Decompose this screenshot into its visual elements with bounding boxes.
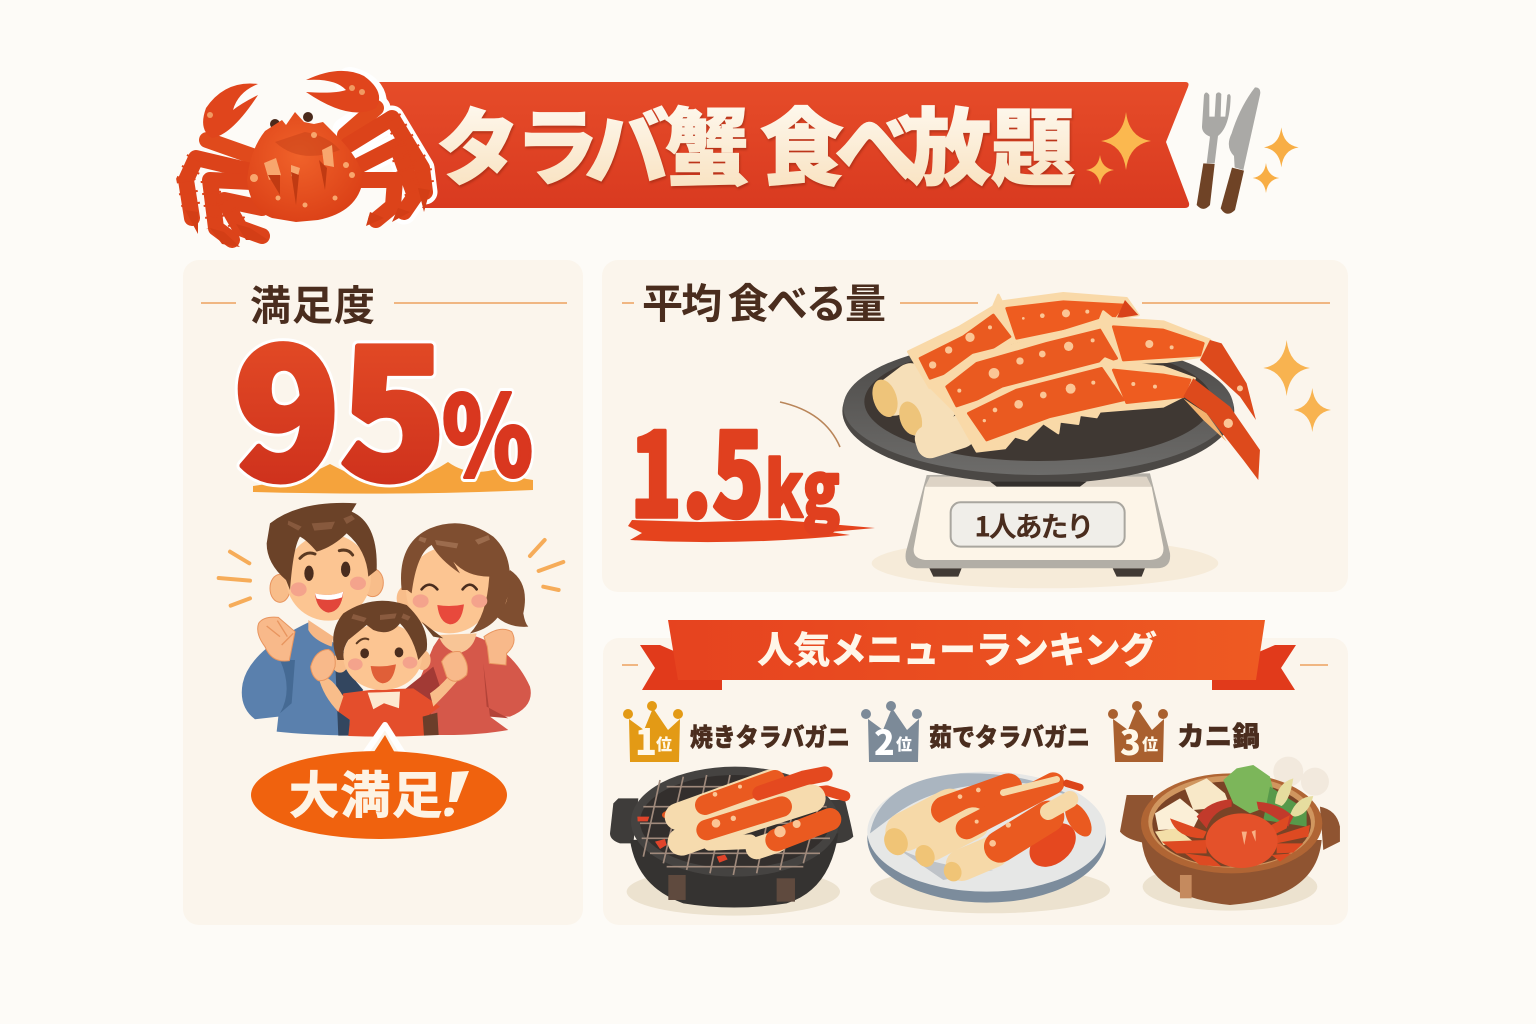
panel: satisfaction <box>183 260 583 925</box>
crown gold <box>623 701 683 766</box>
knife <box>1221 87 1260 214</box>
white outline on right side <box>345 82 425 212</box>
ribbon text: 人気メニューランキング <box>757 620 1157 674</box>
number: 95 <box>234 274 446 531</box>
95 percent statistic <box>234 274 533 531</box>
underline swoosh <box>253 462 533 494</box>
average amount heading: 平均 食べる量 <box>642 270 886 330</box>
rank 1 <box>623 701 850 766</box>
child <box>311 601 467 737</box>
cutlery icon <box>1197 87 1299 214</box>
number outline: 95 <box>234 274 446 531</box>
pot handles <box>1120 795 1340 850</box>
crab illustration <box>185 71 430 247</box>
scale and crab legs illustration <box>842 293 1331 588</box>
title banner <box>378 82 1189 208</box>
leg tips <box>185 188 430 247</box>
1.5kg statistic <box>628 383 875 551</box>
steam <box>1273 757 1329 796</box>
crown gold: 位 <box>656 731 672 755</box>
cutlery sparkles <box>1253 127 1299 193</box>
crab leg bottom <box>911 358 1260 480</box>
crab leg top <box>867 293 1138 422</box>
scale <box>906 473 1170 577</box>
crab shell <box>247 112 363 222</box>
panel: menu ranking <box>603 638 1348 925</box>
scale display <box>951 502 1125 547</box>
rank 1 label: 焼きタラバガニ <box>690 718 850 754</box>
banner sparkles <box>1086 112 1151 185</box>
father <box>242 503 383 736</box>
panel: average amount <box>602 260 1348 592</box>
percent sign: % <box>442 348 533 508</box>
dish: boiled crab <box>867 772 1110 913</box>
brush underline <box>628 520 875 542</box>
sparkles <box>1263 340 1331 432</box>
crown bronze <box>1108 701 1168 765</box>
boiled legs <box>880 779 1097 884</box>
crab legs <box>186 108 425 240</box>
crown gold: 1 <box>635 714 657 766</box>
celebration lines <box>219 540 563 606</box>
crown bronze: 位 <box>1142 731 1158 755</box>
crab claws <box>306 71 379 112</box>
crown silver: 2 <box>874 716 895 765</box>
rank 3 label: カニ鍋 <box>1177 715 1260 754</box>
rank 2 label: 茹でタラバガニ <box>929 718 1090 754</box>
mother <box>397 523 531 735</box>
rank 3 <box>1108 701 1260 765</box>
crab eyes <box>270 112 313 129</box>
crab leg middle <box>895 312 1256 442</box>
exclamation mark <box>444 771 469 816</box>
unit: kg <box>765 429 840 539</box>
hot pot crab <box>1162 813 1310 868</box>
dish: grilled crab <box>610 767 853 916</box>
scale display: 1人あたり <box>974 506 1094 546</box>
bubble text: 大満足 <box>289 756 442 828</box>
plate <box>842 338 1234 487</box>
crown silver: 位 <box>896 731 912 755</box>
crown silver <box>861 701 922 765</box>
vegetables and tofu <box>1155 765 1313 845</box>
rank 2 <box>861 701 1090 765</box>
ranking ribbon <box>622 620 1328 690</box>
dish: crab hot pot <box>1120 757 1340 911</box>
fork <box>1197 92 1231 209</box>
value: 1.5 <box>630 383 764 551</box>
title text: タラバ蟹食べ放題 <box>436 82 1075 203</box>
speech bubble <box>251 725 507 839</box>
grilled legs <box>665 774 845 848</box>
percent outline: % <box>442 348 533 508</box>
satisfaction heading: 満足度 <box>250 272 375 332</box>
scale shadow <box>872 538 1218 588</box>
crown bronze: 3 <box>1120 716 1141 765</box>
family illustration <box>219 503 563 737</box>
